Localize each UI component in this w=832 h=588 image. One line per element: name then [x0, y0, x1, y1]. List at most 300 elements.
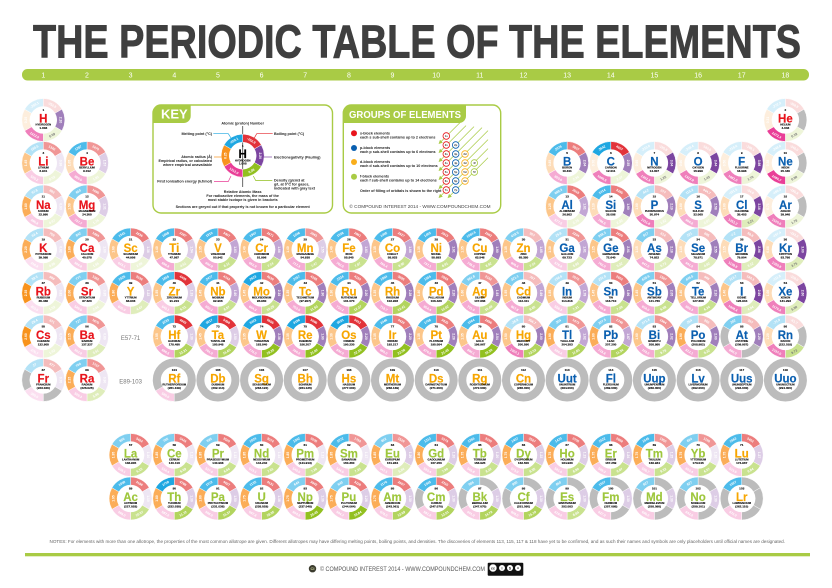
orbital filling diagram: 5d: [463, 170, 467, 174]
element: Cl: CHLORINE: [735, 209, 749, 213]
element: Zr: [153, 272, 196, 314]
element: Sr: 87.620: [82, 299, 92, 303]
element: Lv: [681, 362, 716, 398]
element: Hg: -38.8: [511, 318, 519, 325]
element: V: 50.942: [213, 255, 223, 259]
element: Sr: STRONTIUM: [79, 296, 96, 300]
element: Uup: [637, 362, 672, 398]
block legend: each s sub-shell contains up to 2 electrons: [360, 136, 435, 140]
element: Ir: [371, 315, 414, 358]
element: Nd: 144.242: [256, 461, 267, 465]
element: Ar: [764, 185, 807, 228]
element: Rf: 580.0: [161, 392, 170, 399]
element: I: 184.3: [746, 274, 755, 282]
element: Uut: UNUNTRIUM: [559, 383, 576, 387]
element: Fr: 677: [49, 362, 55, 368]
element: Tl: 204.383: [562, 342, 573, 346]
element: Nb: 41: [216, 281, 220, 285]
element: Bk: 601.0: [466, 510, 476, 518]
element: Mg: 12: [85, 195, 89, 199]
element: Li: LITHIUM: [38, 166, 50, 170]
key labels: indicated with gray text: [274, 186, 316, 190]
element: Tl: 1.90: [548, 333, 552, 340]
element: Md: 101: [652, 487, 657, 491]
element: Ds: Ds: [429, 373, 444, 385]
group number bar: 8: [347, 72, 351, 80]
element: Tc: 4265: [310, 274, 318, 282]
element: Co: 1.35: [373, 246, 377, 253]
block legend: Order of filling of orbitals is shown to the right: [360, 189, 442, 193]
element: Ni: 8.91: [441, 261, 449, 268]
element: Pt: 195.084: [431, 342, 442, 346]
element: Ne: [764, 142, 807, 184]
element: Ba: 502.9: [74, 348, 83, 356]
element: Uup: Uup: [643, 373, 666, 385]
element: Np: NEPTUNIUM: [297, 501, 314, 505]
element: Zn: 30: [522, 238, 525, 242]
element: Cl: 35.453: [737, 212, 747, 216]
groups header tab: [343, 105, 466, 123]
element: Tb: 1.75: [460, 452, 464, 458]
element: Ni: 1.91: [452, 246, 456, 253]
element: Nb: 92.906: [213, 299, 223, 303]
element: Am: 1.75: [373, 495, 377, 502]
element: Y: YTTRIUM: [125, 296, 137, 300]
element: B: BORON: [562, 166, 572, 170]
element: Cd: [502, 272, 545, 314]
element: Sg: SEABORGIUM: [252, 383, 272, 387]
element: Pu: 3228: [353, 480, 362, 487]
group number bar: 14: [607, 72, 615, 80]
key labels: Relative Atomic Mass: [224, 190, 262, 194]
element: F: [720, 142, 763, 184]
element: C: 6: [610, 151, 612, 155]
element: He: 2: [785, 108, 787, 112]
element: O: -183.0: [702, 144, 712, 152]
element: S: 2.58: [713, 203, 717, 210]
element: Sc: Sc: [124, 243, 138, 255]
element: W: [240, 315, 283, 358]
element: Tc: 702.0: [292, 305, 301, 312]
element: Sr: Sr: [81, 286, 94, 298]
element: Pu: 19.84: [353, 510, 362, 518]
key labels: Sections are greyed out if that property is not known for a particular element: [176, 205, 311, 209]
element: Pb: Pb: [603, 330, 618, 342]
element: Pt: Pt: [430, 330, 442, 342]
element: Ir: 22.56: [397, 348, 406, 356]
block legend: each p sub-shell contains up to 6 electrons: [360, 150, 436, 154]
element: Nb: NIOBIUM: [212, 296, 224, 300]
element: Pt: 21.45: [440, 348, 450, 356]
element: Sr: 38: [85, 281, 89, 285]
element: Ge: 72.640: [606, 255, 616, 259]
element: Si: 2.33: [616, 218, 624, 225]
element: Tm: 1.25: [670, 452, 674, 458]
element: O: 15.999: [693, 169, 703, 173]
element: Mo: [240, 272, 283, 314]
element: Cn: 112: [521, 368, 526, 372]
element: Pd: 1555: [423, 274, 432, 282]
element: Yb: 603.4: [685, 467, 694, 474]
element: Sn: 1.96: [626, 290, 630, 296]
element: Mg: 650: [75, 188, 82, 195]
element: Se: 34: [696, 238, 700, 242]
element: Au: 196.967: [474, 342, 486, 346]
element: Pu: 640: [337, 480, 344, 487]
group number bar: 9: [391, 72, 395, 80]
element: Ir: IRIDIUM: [387, 339, 398, 343]
element: S: 115.2: [685, 188, 694, 195]
element: Tb: Tb: [473, 448, 487, 460]
element: Pu: [327, 477, 370, 520]
element: Ru: 4150: [353, 274, 362, 282]
element: Nd: Nd: [254, 448, 269, 460]
element: Bk: [458, 477, 501, 520]
element: Bk: (247.070): [473, 504, 486, 508]
element: Ho: [546, 434, 589, 476]
element: Si: Si: [605, 200, 616, 212]
element: Ti: 1.40: [155, 246, 159, 253]
element: Eu: 822: [380, 437, 387, 443]
element: Dy: 2567: [528, 436, 536, 444]
element: Ta: Ta: [212, 330, 225, 342]
element: P: 44.2: [642, 188, 650, 195]
element: Gd: 7.90: [441, 467, 449, 474]
element: Ir: Ir: [389, 330, 397, 342]
element: Rn: Rn: [778, 330, 793, 342]
element: Ca: 842: [75, 231, 82, 238]
element: Np: 20.45: [309, 510, 319, 518]
element: Ru: RUTHENIUM: [341, 296, 358, 300]
element: Eu: EUROPIUM: [385, 458, 401, 462]
element: Ba: 137.327: [81, 342, 93, 346]
element: C: 0.70: [591, 160, 595, 166]
element: Eu: Eu: [385, 448, 400, 460]
element: No: (259.101): [691, 504, 705, 508]
element: Fr: 87: [42, 368, 45, 372]
element: Re: 186.207: [300, 342, 311, 346]
element: Rh: 3695: [397, 274, 405, 282]
element: Be: 1287: [74, 144, 83, 152]
element: V: 650.9: [204, 261, 214, 269]
orbital filling diagram: 7p: [454, 188, 458, 192]
element: Es: 1.30: [582, 495, 586, 502]
element: Ga: [546, 228, 589, 271]
element: Fl: Fl: [606, 373, 616, 385]
element: Ge: GERMANIUM: [602, 252, 620, 256]
element: Li: 1342: [48, 144, 56, 152]
element: Ti: 4.51: [179, 261, 187, 268]
element: Kr: 83.798: [781, 255, 790, 259]
element: In: 49: [565, 281, 569, 285]
element: Md: 1.30: [670, 495, 674, 502]
element: O: [677, 142, 720, 184]
element: Pa: 1.50: [233, 495, 237, 502]
element: Yb: 1.10: [713, 452, 717, 458]
element: Bk: 14.79: [484, 510, 493, 518]
element: Sc: 2836: [135, 231, 144, 238]
key sample ring: -259.1: [229, 137, 239, 145]
element: Ce: 140.116: [169, 461, 180, 465]
element: Ar: ARGON: [780, 209, 790, 213]
element: La: 920: [119, 437, 125, 443]
element: Tb: 1356: [467, 436, 475, 444]
element: Fm: 1.30: [626, 495, 630, 502]
element: Kr: 1350.8: [771, 261, 782, 269]
element: Hs: Hs: [342, 373, 356, 385]
element: Bi: 208.980: [649, 342, 660, 346]
element: Cn: Cn: [516, 373, 531, 385]
element: Th: 1.30: [190, 495, 194, 502]
element: Fm: Fm: [602, 492, 619, 504]
element: Hg: Hg: [516, 330, 531, 342]
element: Zr: 91.224: [170, 299, 179, 303]
element: Ca: [65, 228, 109, 271]
element: Cf: 98: [522, 487, 525, 491]
element: Mo: MOLYBDENUM: [252, 296, 272, 300]
element: Mg: 1.50: [68, 203, 72, 210]
element: Lr: Lr: [736, 492, 748, 504]
element: Ne: 2080.7: [771, 174, 782, 183]
element: Sn: 50: [609, 281, 613, 285]
element: Xe: 131.293: [780, 299, 791, 303]
element: Ca: Ca: [80, 243, 95, 255]
element: Fr: FRANCIUM: [36, 383, 51, 387]
element: He: -272.2: [772, 101, 782, 109]
element: Pb: 11.34: [615, 348, 624, 356]
element: Zn: 907: [529, 231, 536, 238]
element: W: 19.25: [266, 348, 275, 356]
element: Ge: 2820: [615, 231, 624, 238]
group number bar: 17: [738, 72, 746, 80]
element: Pm: Pm: [296, 448, 314, 460]
element: Sn: Sn: [603, 286, 618, 298]
element: Zr: 4409: [179, 274, 187, 282]
element: Pt: [415, 315, 458, 358]
key axis line: [242, 126, 244, 187]
key sample ring: 1312.0: [228, 167, 239, 175]
element: Lv: (292.000): [691, 386, 705, 390]
element: Sm: 1072: [336, 436, 345, 444]
element: Po: 2.00: [713, 333, 717, 340]
element: Lu: [720, 434, 763, 476]
element: Ar: Ar: [779, 200, 792, 212]
element: No: 102: [696, 487, 701, 491]
element: Pr: 1.13: [233, 452, 237, 458]
element: Ba: BARIUM: [82, 339, 93, 343]
element: Pm: 540.0: [292, 467, 301, 474]
element: Cr: [240, 228, 283, 271]
element: Si: 14: [609, 195, 613, 199]
block legend: [351, 130, 442, 193]
element: Cs: 132.905: [38, 342, 49, 346]
element: Tl: 11.85: [571, 348, 581, 356]
orbital filling diagram: 5p: [454, 170, 458, 174]
element: Ni: 2913: [441, 231, 449, 238]
orbital filling diagram: 1s: [445, 134, 448, 138]
element: Cr: Cr: [255, 243, 269, 255]
element: Ni: 1.35: [417, 246, 421, 253]
group number bar: [22, 69, 809, 80]
element: Cd: 867.8: [510, 305, 519, 312]
element: Rh: [371, 272, 414, 314]
element: Dy: 573.0: [510, 467, 519, 474]
element: P: 15: [653, 195, 656, 199]
element: Pa: 4027: [222, 480, 231, 487]
element: U: [240, 477, 283, 520]
element grid: [22, 98, 807, 520]
element: Po: 254: [686, 318, 693, 325]
element: In: [546, 272, 589, 314]
element: Np: 1.36: [321, 495, 325, 502]
element: Pd: 46: [434, 281, 438, 285]
element: Pa: [196, 477, 239, 520]
element: Uut: 113: [565, 368, 570, 372]
element: Te: 6.24: [703, 305, 711, 312]
element: Ac: 89: [129, 487, 133, 491]
element: F: 18.998: [737, 169, 747, 173]
element: Hg: 2.00: [539, 333, 543, 340]
element: Po: 9.32: [703, 348, 711, 355]
element: Mo: 2623: [249, 274, 257, 282]
element: Li: [22, 142, 65, 184]
element: Dy: DYSPROSIUM: [514, 458, 533, 462]
element: Nb: 1.45: [199, 290, 203, 296]
element: At: 2.20: [757, 333, 761, 340]
element: Xe: 2.60: [801, 290, 805, 296]
element: Cr: 1.66: [277, 246, 281, 253]
element: Rf: RUTHERFORDIUM: [162, 383, 187, 387]
element: Au: 2856: [484, 318, 493, 325]
element: Pm: 1042: [292, 436, 301, 444]
element: P: 1011.8: [640, 218, 651, 226]
element: V: 6.11: [223, 261, 231, 268]
orbital filling diagram: 3p: [454, 152, 458, 156]
element: Na: 0.97: [48, 218, 56, 225]
element: Ra: RADIUM: [82, 383, 93, 387]
element: Rh: 719.7: [379, 305, 388, 312]
element: Gd: 3273: [441, 436, 449, 444]
element: Pu: Pu: [342, 492, 356, 504]
element: Al: Al: [561, 200, 573, 212]
element: Cs: CAESIUM: [37, 339, 50, 343]
element: Nb: 652.1: [204, 305, 214, 312]
element: Cs: 671: [49, 318, 55, 325]
element: No: [677, 477, 720, 520]
element: Ag: 1.93: [495, 290, 499, 296]
element: Rb: 688: [49, 275, 55, 281]
group number bar: 10: [432, 72, 440, 80]
element: Np: (237.048): [299, 504, 312, 508]
element: Ga: GALLIUM: [561, 252, 574, 256]
element: Cn: COPERNICIUM: [514, 383, 534, 387]
key sample ring: HYDROGEN: [235, 158, 251, 162]
element: Fm: FERMIUM: [605, 501, 618, 505]
element: K: 2.20: [24, 246, 28, 253]
element: Pu: 94: [347, 487, 351, 491]
element: Cl: -101.5: [728, 187, 738, 196]
element: N: [633, 142, 676, 184]
element: Fe: 26: [347, 238, 351, 242]
element: Mt: Mt: [386, 373, 399, 385]
element: Rn: -71.0: [772, 318, 781, 325]
element: As: [633, 228, 676, 271]
element: Bh: BOHRIUM: [299, 383, 312, 387]
element: W: TUNGSTEN: [254, 339, 269, 343]
element: Rb: [22, 272, 65, 314]
element: W: 5555: [266, 318, 275, 325]
element: W: 183.840: [256, 342, 267, 346]
element: Ag: SILVER: [475, 296, 485, 300]
element: F: -219.6: [728, 144, 738, 152]
element: Xe: 54: [784, 281, 787, 285]
element: Br: Br: [735, 243, 749, 255]
element: F: F: [738, 156, 745, 168]
element: He: 2372.3: [771, 131, 782, 140]
element: Cd: 767: [529, 275, 536, 281]
element: Nd: 60: [260, 443, 264, 447]
element: Mo: 95.960: [257, 299, 267, 303]
element: Te: 988: [703, 275, 710, 281]
element: Np: 3902: [310, 480, 318, 487]
element: Tl: 1473: [572, 318, 580, 325]
element: Bi: 271.4: [641, 318, 650, 325]
element: Ta: [196, 315, 239, 358]
icon: creative commons licence badge: $: [509, 566, 511, 570]
element: Dy: 8.55: [529, 467, 536, 474]
element: Cu: 1.90: [495, 246, 499, 253]
key labels: Melting point (°C): [181, 132, 213, 136]
element: Bi: 1.60: [635, 333, 639, 340]
element: Pa: 1.80: [199, 495, 203, 502]
element: Co: [371, 228, 414, 271]
orbital filling diagram: 6p: [454, 179, 458, 183]
element: Cl: 1.00: [722, 203, 726, 210]
element: Rg: Rg: [472, 373, 487, 385]
element: Sb: 6.68: [659, 305, 667, 312]
element: Zn: Zn: [516, 243, 531, 255]
element: Tm: THULIUM: [648, 458, 661, 462]
element: Ge: 32: [609, 238, 613, 242]
element: Mg: 737.7: [74, 218, 83, 226]
element: Sm: 544.5: [335, 467, 345, 474]
element: Y: 39: [129, 281, 133, 285]
element: Al: 660.3: [554, 188, 563, 195]
element: Ce: 58: [173, 443, 176, 447]
element: Np: 604.5: [292, 510, 301, 518]
element: Am: Am: [383, 492, 402, 504]
element: Pb: LEAD: [607, 339, 615, 343]
key sample ring: 1: [242, 144, 244, 148]
key labels: Atomic (proton) Number: [221, 122, 265, 126]
element: N: -210.0: [641, 144, 651, 152]
element: Hf: 1.55: [155, 333, 159, 340]
element: Co: 2927: [397, 231, 405, 238]
key sample ring: H: [239, 149, 247, 161]
block legend: each f sub-shell contains up to 14 electrons: [360, 178, 437, 182]
element: Ir: 2446: [380, 318, 388, 325]
element: S: [677, 185, 720, 228]
element: Ni: 28: [434, 238, 438, 242]
element: Ba: 727: [75, 318, 82, 325]
element: Be: [65, 142, 109, 184]
element: Co: 58.933: [388, 255, 398, 259]
element: Mt: [375, 362, 410, 398]
element: Mn: 1246: [292, 231, 301, 238]
element: Br: [720, 228, 763, 271]
element: Ds: (271.000): [430, 386, 443, 390]
element: Ac: (227.028): [124, 504, 137, 508]
